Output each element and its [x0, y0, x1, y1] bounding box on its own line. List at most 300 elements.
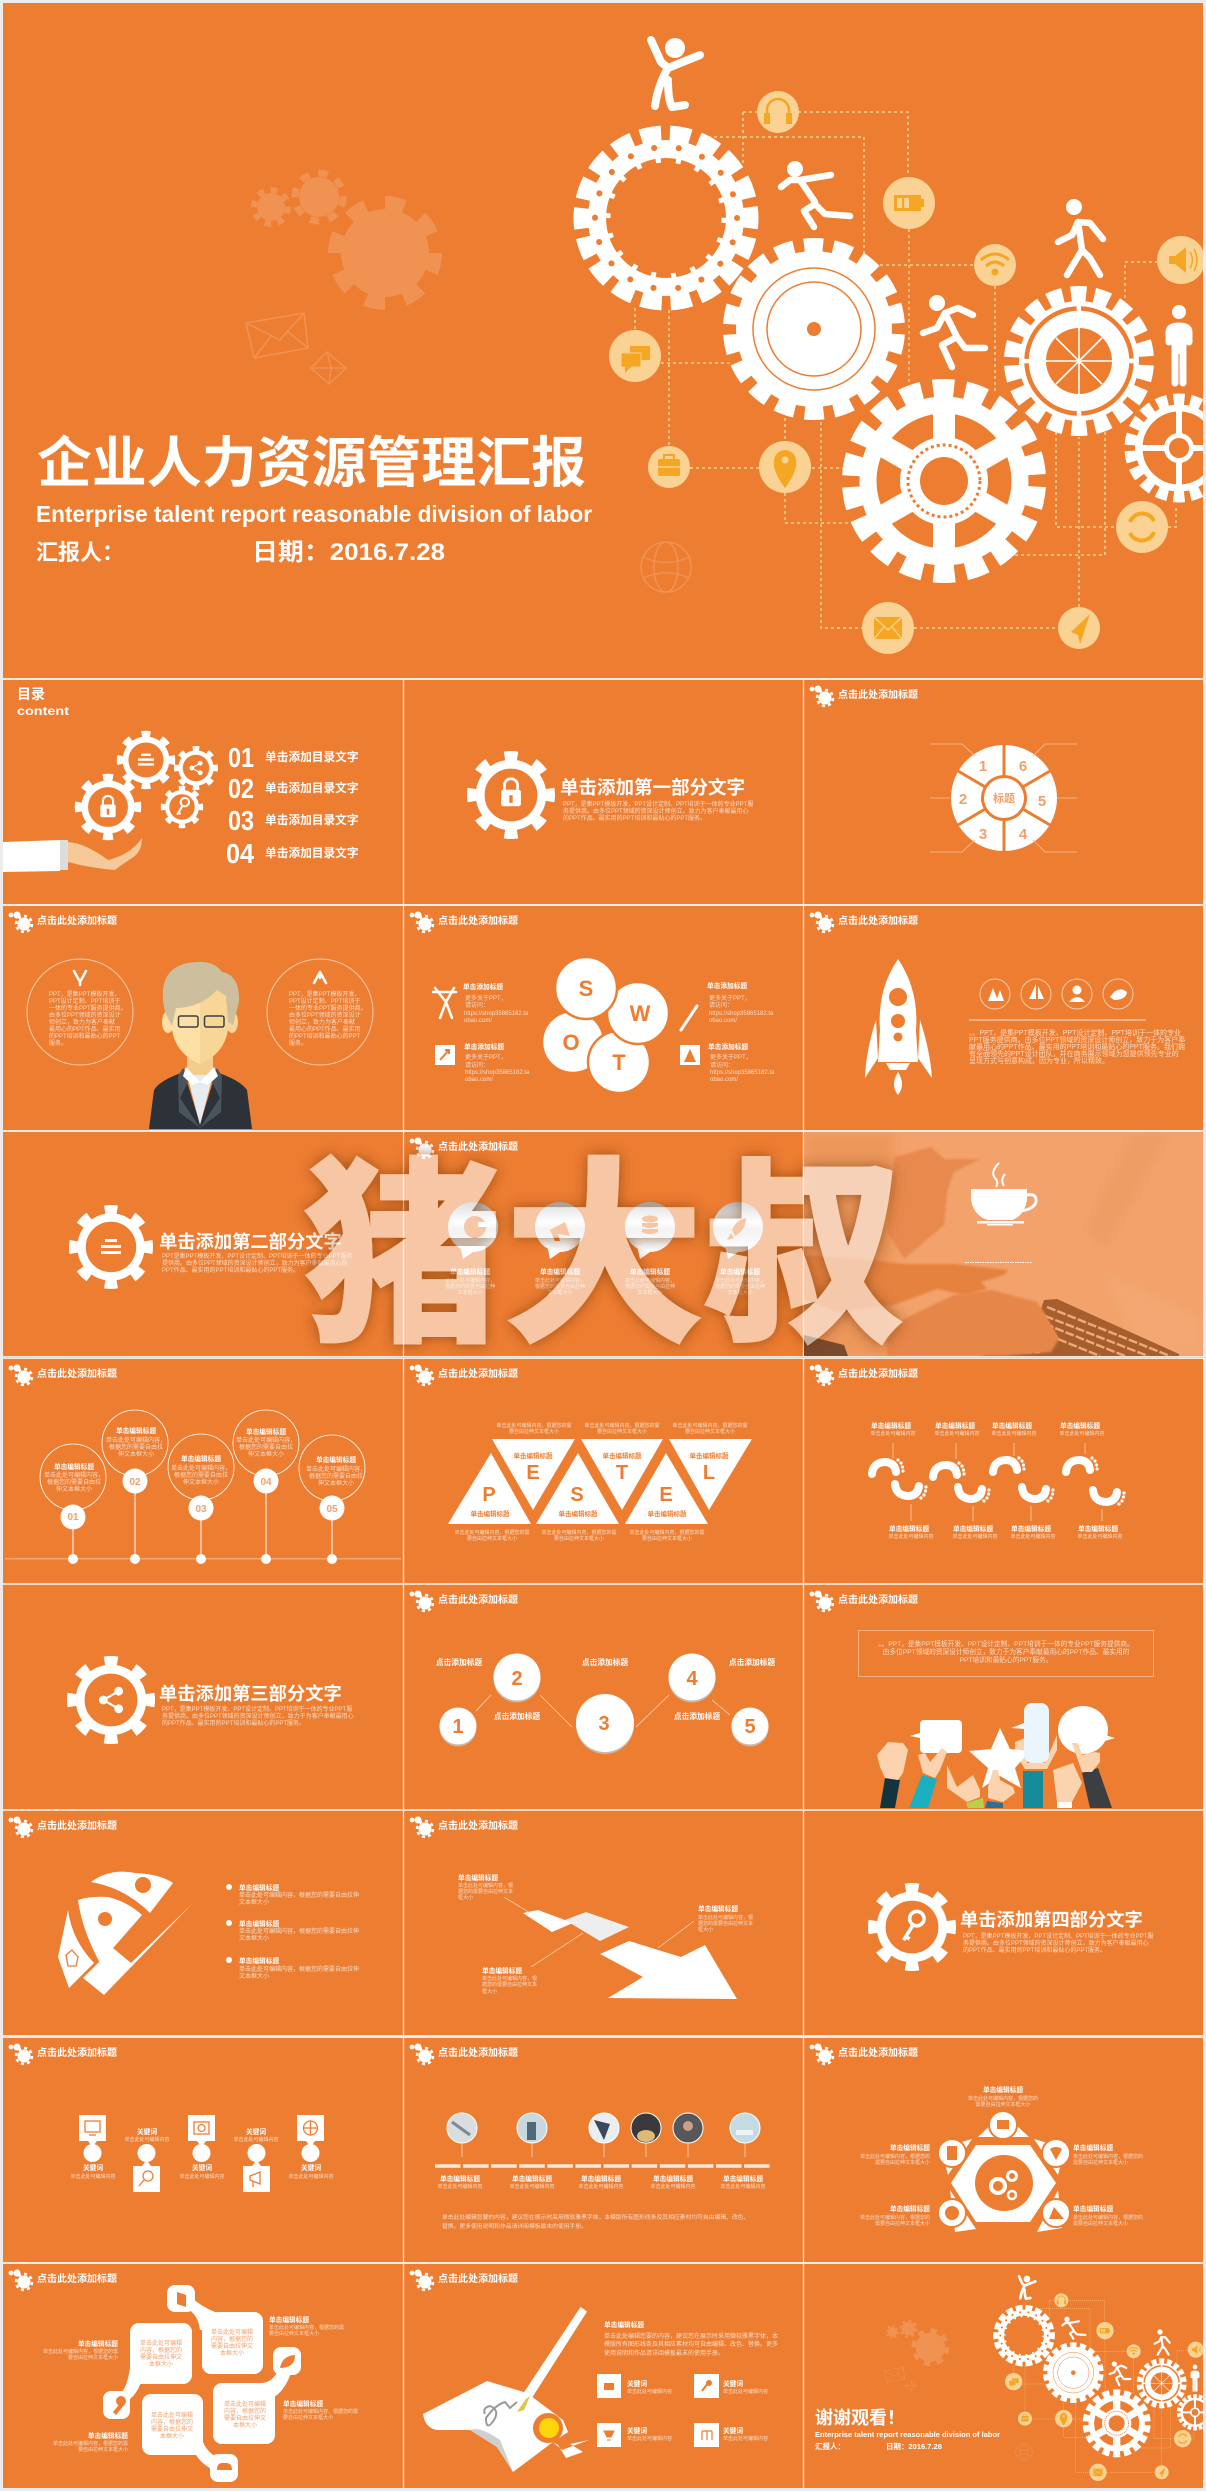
four round icons	[980, 979, 1133, 1009]
header title: 点击此处添加标题	[438, 2046, 518, 2059]
header logo	[810, 1364, 833, 1385]
side label right bottom: 单击此处可编辑内容，根据您的需	[283, 2408, 358, 2415]
label right lower	[1073, 2204, 1143, 2227]
bullet list: 文本框大小	[239, 1934, 269, 1942]
upper labels	[870, 1421, 1105, 1437]
label 3: 框大小	[482, 1988, 497, 1995]
header logo	[9, 1364, 32, 1385]
card texts: 内容，根据您的	[140, 2346, 182, 2354]
text above triangles: 要自由拉伸文本框大小	[597, 1428, 647, 1435]
side label right top: 单击此处可编辑内容，根据您的需	[269, 2324, 344, 2331]
flag icons	[85, 2121, 318, 2187]
illustration: rocket	[865, 959, 932, 1095]
header logo	[9, 2044, 32, 2064]
label 2: 单击编辑标题	[698, 1904, 738, 1913]
header logo	[9, 912, 32, 932]
section body: 务提供商。由多位PPT领域的资深设计师创立，致力于为客户奉献最用心	[162, 1712, 354, 1720]
rocket body text	[969, 1028, 1185, 1065]
label 3: 单击此处可编辑内容，根	[482, 1975, 537, 1982]
step labels: 点击添加标题	[729, 1657, 775, 1667]
header title: 点击此处添加标题	[838, 914, 918, 927]
text box: 。。PPT，是集PPT模板开发、PPT设计定制、PPT培训于一体的专业PPT服务提供商。	[878, 1639, 1134, 1648]
umbrella shape	[58, 1872, 192, 1995]
label left lower	[860, 2204, 930, 2227]
lower labels: 单击编辑标题	[953, 1524, 993, 1533]
section title: 单击添加第三部分文字	[159, 1683, 342, 1704]
card texts: 单击此处可编辑	[211, 2328, 253, 2336]
keyword tiles: 单击此处可编辑内容	[627, 2435, 672, 2442]
text below triangles	[454, 1529, 705, 1542]
upper labels: 单击编辑标题	[871, 1421, 911, 1430]
timeline labels: 单击此处可编辑内容	[720, 2183, 766, 2190]
photo pins	[447, 2113, 760, 2157]
note circle left: 最用心的PPT作品、最实用	[49, 1025, 121, 1033]
timeline body: 单击此处编辑您要的内容，建议您在展示时采用微软雅黑字体，本模版所有图形线条及其相应素材均可自由编辑、改色、	[442, 2213, 749, 2221]
bullet list: 单击编辑标题	[239, 1956, 279, 1965]
note circle left: 一体的专业PPT服务提供商。	[49, 1004, 127, 1012]
gear E	[1131, 400, 1206, 496]
SWOT petals: W	[630, 1001, 651, 1026]
side label left top: 要自由拉伸文本框大小	[68, 2354, 118, 2361]
upper labels: 单击此处可编辑内容	[991, 1430, 1037, 1437]
note body: 使用说明和作品请详阅模板最末的使用手册。	[604, 2349, 724, 2357]
wheel diagram: 标题	[993, 791, 1015, 805]
rocket body text: 有全面领先的PPT设计团队，并在商务展示领域为您提供领先专业的	[969, 1049, 1179, 1058]
timeline labels	[437, 2174, 766, 2190]
header logo	[810, 686, 833, 706]
bubble 2: 文本框大小	[547, 1289, 573, 1296]
icon: wifi	[974, 244, 1016, 286]
slide backgrounds grid	[3, 680, 1203, 2488]
slide: section three	[72, 1662, 354, 1738]
timeline item 02: 伸文本框大小	[118, 1450, 154, 1458]
slide: person with two notes	[9, 912, 373, 1129]
header logo	[410, 912, 433, 932]
illustration: businessman	[149, 962, 252, 1129]
bullet list: 单击此处可编辑内容，根据您的需要自由拉伸	[239, 1891, 359, 1899]
triangle labels: 单击编辑标题	[690, 1451, 729, 1460]
note circle left: 由多位PPT领域的资深设计	[49, 1011, 121, 1019]
card texts: 单击此处可编辑	[224, 2400, 266, 2408]
timeline item 05: 伸文本框大小	[318, 1479, 354, 1487]
note circle left: PPT，是集PPT模板开发、	[49, 990, 120, 998]
letters: E	[526, 1462, 540, 1484]
SWOT item T: obao.com/	[710, 1077, 738, 1083]
triangle labels: 单击编辑标题	[470, 1509, 510, 1518]
SWOT item O: 单击添加标题	[464, 1042, 504, 1051]
note circle right	[267, 959, 373, 1065]
slide: raised hands	[810, 1590, 1154, 1808]
upper labels: 单击编辑标题	[935, 1421, 975, 1430]
keyword labels: 单击此处可编辑内容	[179, 2173, 225, 2180]
timeline item 04: 根据您的需要自由拉	[239, 1443, 293, 1451]
icon: refresh	[1116, 501, 1168, 553]
section body	[162, 1252, 352, 1274]
side label left bottom	[53, 2431, 128, 2453]
thanks title: 谢谢观看！	[815, 2408, 905, 2428]
bullet list: 单击此处可编辑内容，根据您的需要自由拉伸	[239, 1927, 359, 1935]
timeline item 05: 单击编辑标题	[316, 1455, 356, 1464]
watermark: 叔	[705, 1098, 901, 1381]
label 1	[458, 1873, 513, 1901]
label 1: 单击编辑标题	[458, 1873, 498, 1882]
mini gear artwork	[884, 2276, 1206, 2481]
keyword tiles: 单击此处可编辑内容	[627, 2388, 672, 2395]
note circle right: 的PPT培训和最贴心的PPT	[289, 1032, 361, 1040]
triangle labels: 单击编辑标题	[558, 1509, 598, 1518]
header logo	[410, 1590, 433, 1611]
letters: E	[659, 1484, 673, 1506]
section title: 单击添加第四部分文字	[960, 1909, 1143, 1930]
side label right top: 单击编辑标题	[269, 2315, 309, 2324]
header logo	[410, 2270, 433, 2290]
header title: 点击此处添加标题	[838, 2046, 918, 2059]
card texts: 需要自由拉伸文	[224, 2414, 266, 2422]
note heading: 单击编辑标题	[604, 2320, 644, 2329]
lower labels: 单击编辑标题	[889, 1524, 929, 1533]
bubble 4	[713, 1202, 765, 1296]
timeline item 01	[40, 1444, 106, 1564]
slide: table of contents	[3, 686, 359, 872]
gear D	[1012, 294, 1146, 428]
contents list: 02	[228, 773, 254, 804]
SWOT item S: 请访问：	[465, 1001, 489, 1009]
upper labels: 单击编辑标题	[1060, 1421, 1100, 1430]
SWOT item S: obao.com/	[464, 1018, 492, 1024]
section body	[963, 1932, 1153, 1954]
note circle left: 师创立，致力为客户奉献	[49, 1018, 115, 1026]
step labels: 点击添加标题	[674, 1711, 720, 1721]
heading: content: content	[17, 704, 69, 718]
baseline	[5, 1558, 401, 1560]
gear A	[581, 133, 751, 303]
header title: 点击此处添加标题	[838, 1367, 918, 1380]
connected cards	[103, 2285, 301, 2482]
bubble 3: 单击此处可编辑内容，	[625, 1277, 675, 1284]
step numbers: 3	[598, 1713, 610, 1735]
timeline item 03	[168, 1434, 234, 1564]
text above triangles: 要自由拉伸文本框大小	[509, 1428, 559, 1435]
cover title: 企业人力资源管理汇报	[37, 432, 586, 494]
bubble 2: 单击此处可编辑内容，	[535, 1277, 585, 1284]
text above triangles: 单击此处可编辑内容，根据您的需	[496, 1422, 572, 1429]
card texts: 内容，根据您的	[151, 2418, 193, 2426]
slide: five circles timeline	[5, 1364, 401, 1564]
header logo	[9, 1816, 32, 1837]
side label right bottom	[283, 2399, 358, 2421]
SWOT item S	[433, 982, 529, 1024]
timeline item 05: 单击此处可编辑内容，	[306, 1465, 366, 1473]
bubble 3: 文本框大小	[637, 1289, 663, 1296]
step numbers: 4	[686, 1668, 698, 1690]
keyword tiles: 单击此处可编辑内容	[723, 2388, 768, 2395]
bubble 4: 文本框大小	[727, 1289, 753, 1296]
slide: five numbered steps	[410, 1590, 775, 1754]
label 2: 单击此处可编辑内容，根	[698, 1914, 753, 1921]
slide: six-part wheel	[810, 686, 1077, 852]
section body: 提供商。由多位PPT领域的资深设计师创立，致力为客户奉献最用心的	[162, 1259, 348, 1267]
timeline item 01: 单击此处可编辑内容，	[44, 1471, 104, 1479]
side label left bottom: 要自由拉伸文本框大小	[78, 2446, 128, 2453]
keyword labels: 关键词	[246, 2127, 266, 2136]
header logo	[410, 2044, 433, 2064]
label top: 单击此处可编辑内容，根据您的	[968, 2095, 1038, 2102]
triangle labels	[470, 1451, 729, 1518]
slide 1: cover	[3, 3, 1206, 678]
rocket body text: PPT服务提供商。由多位PPT领域的资深设计师创立，致力于为客户奉	[969, 1035, 1185, 1044]
keyword labels: 单击此处可编辑内容	[233, 2136, 279, 2143]
label left upper: 单击编辑标题	[890, 2143, 930, 2152]
keyword tiles	[597, 2374, 768, 2447]
section body: PPT是集PPT模板开发、PPT设计定制、PPT培训于一体的专业PPT服务	[162, 1252, 352, 1260]
illustration: pen and signed paper	[423, 2309, 589, 2472]
timeline labels: 单击此处可编辑内容	[509, 2183, 555, 2190]
wheel diagram: 6	[1019, 758, 1027, 775]
lower labels: 单击此处可编辑内容	[888, 1533, 934, 1540]
SWOT item W: 请访问：	[709, 1001, 733, 1009]
keyword labels: 关键词	[83, 2163, 103, 2172]
label left upper: 需要自由拉伸文本框大小	[875, 2159, 930, 2166]
wheel diagram: 5	[1038, 793, 1046, 810]
lower labels: 单击此处可编辑内容	[1010, 1533, 1056, 1540]
SWOT item T: 单击添加标题	[708, 1042, 748, 1051]
watermark: 猪	[304, 1098, 500, 1381]
header title: 点击此处添加标题	[37, 914, 117, 927]
SWOT item W	[681, 981, 774, 1030]
contents list: 04	[226, 838, 254, 869]
text above triangles: 要自由拉伸文本框大小	[685, 1428, 735, 1435]
side label left top	[43, 2339, 118, 2361]
note body: 模版所有图形线条及其相应素材均可自由编辑、改色、替换。更多	[604, 2340, 778, 2348]
letters: L	[703, 1462, 715, 1484]
SWOT item O: 请访问：	[465, 1061, 489, 1069]
hand holding gears	[3, 838, 142, 872]
timeline item 05: 根据您的需要自由拉	[309, 1472, 363, 1480]
wheel diagram: 2	[959, 791, 967, 808]
bubble 1: 根据您的需要自由拉伸	[445, 1283, 495, 1290]
label left lower: 单击编辑标题	[890, 2204, 930, 2213]
wheel diagram: 3	[979, 826, 987, 843]
timeline item 02: 单击编辑标题	[116, 1426, 156, 1435]
note circle right: 师创立，致力为客户奉献	[289, 1018, 355, 1026]
keyword labels: 关键词	[137, 2127, 157, 2136]
SWOT item O	[435, 1042, 530, 1083]
wheel diagram: 1	[979, 758, 987, 775]
upper labels: 单击此处可编辑内容	[870, 1430, 916, 1437]
SWOT item T	[680, 1042, 775, 1083]
text below triangles: 单击此处可编辑内容，根据您的需	[629, 1529, 705, 1536]
side label right bottom: 单击编辑标题	[283, 2399, 323, 2408]
text above triangles: 单击此处可编辑内容，根据您的需	[584, 1422, 660, 1429]
header title: 点击此处添加标题	[438, 1593, 518, 1606]
note circle right: 服务。	[289, 1039, 307, 1047]
label right lower: 需要自由拉伸文本框大小	[1073, 2220, 1128, 2227]
SWOT petals: O	[562, 1030, 580, 1055]
keyword labels: 单击此处可编辑内容	[70, 2173, 116, 2180]
section body: PPT，是集PPT模板开发、PPT设计定制、PPT培训于一体的专业PPT服	[563, 800, 753, 808]
illustration: raised hands with signs	[877, 1703, 1115, 1808]
bubble 4: 单击编辑标题	[720, 1267, 760, 1276]
label 1: 据您的需要自由拉伸文本	[458, 1888, 513, 1895]
timeline body	[442, 2213, 749, 2230]
text box	[858, 1630, 1154, 1676]
slide: four linked cards	[9, 2270, 358, 2482]
contents list: 01	[228, 742, 254, 773]
footprints	[872, 1456, 1126, 1506]
icon: paper plane	[1058, 607, 1100, 649]
label right upper: 需要自由拉伸文本框大小	[1073, 2159, 1128, 2166]
section body: PPT，是集PPT模板开发、PPT设计定制、PPT培训于一体的专业PPT服	[963, 1932, 1153, 1940]
keyword labels: 关键词	[301, 2163, 321, 2172]
label top: 单击编辑标题	[983, 2085, 1023, 2094]
card texts: 内容，根据您的	[224, 2407, 266, 2415]
slide: SWOT	[410, 912, 775, 1093]
side label left bottom: 单击此处可编辑内容，根据您的需	[53, 2440, 128, 2447]
step numbers	[452, 1668, 756, 1738]
thanks subtitle: Enterprise talent report reasonable division of labor	[815, 2432, 1000, 2439]
text below triangles: 单击此处可编辑内容，根据您的需	[454, 1529, 530, 1536]
bullet list: 文本框大小	[239, 1972, 269, 1980]
divider	[969, 1019, 1146, 1021]
icon: map pin	[759, 441, 811, 493]
note circle left: 的PPT培训和最贴心的PPT	[49, 1032, 121, 1040]
note circle right: 最用心的PPT作品、最实用	[289, 1025, 361, 1033]
connector dashed lines	[635, 112, 1176, 628]
bubble 4: 根据您的需要自由拉伸	[715, 1283, 765, 1290]
bubble 2	[535, 1202, 585, 1296]
slide: section two	[74, 1210, 352, 1284]
bubble 1	[445, 1202, 498, 1296]
step numbers: 5	[744, 1716, 756, 1738]
icon: headphones	[757, 91, 799, 133]
header title: 点击此处添加标题	[438, 914, 518, 927]
side label left bottom: 单击编辑标题	[88, 2431, 128, 2440]
card texts: 单击此处可编辑	[140, 2339, 182, 2347]
bubble 1: 单击编辑标题	[450, 1267, 490, 1276]
step numbers: 1	[452, 1716, 464, 1738]
header logo	[410, 1138, 433, 1158]
slide: thank you	[815, 2276, 1206, 2481]
card texts: 内容，根据您的	[211, 2335, 253, 2343]
label right lower: 单击此处可编辑内容，根据您的	[1073, 2214, 1143, 2221]
ghost gears and envelopes	[246, 173, 691, 592]
timeline labels: 单击编辑标题	[653, 2174, 693, 2183]
icon: chat	[609, 330, 661, 382]
label left lower: 单击此处可编辑内容，根据您的	[860, 2214, 930, 2221]
keyword labels: 单击此处可编辑内容	[124, 2136, 170, 2143]
label 3	[482, 1966, 537, 1995]
header title: 点击此处添加标题	[37, 1367, 117, 1380]
gear C	[851, 388, 1037, 574]
card texts: 本框大小	[160, 2432, 184, 2440]
card texts: 本框大小	[233, 2421, 257, 2429]
slide: rocket	[810, 912, 1185, 1095]
rocket body text: 献最用心的PPT作品、最实用的PPT培训和最贴心的PPT服务。我们拥	[969, 1042, 1185, 1051]
bullet list: 单击编辑标题	[239, 1883, 279, 1892]
label 3: 单击编辑标题	[482, 1966, 522, 1975]
text above triangles	[496, 1422, 748, 1435]
header title: 点击此处添加标题	[438, 1367, 518, 1380]
gear cluster	[79, 734, 215, 836]
keyword labels: 关键词	[192, 2163, 212, 2172]
text below triangles: 要自由拉伸文本框大小	[467, 1535, 517, 1542]
contents list	[226, 742, 359, 869]
rocket body text: 。。PPT，是集PPT模板开发、PPT设计定制、PPT培训于一体的专业	[969, 1028, 1181, 1037]
timeline labels: 单击编辑标题	[440, 2174, 480, 2183]
header logo	[410, 1364, 433, 1385]
step labels: 点击添加标题	[494, 1711, 540, 1721]
letters: S	[570, 1484, 584, 1506]
side label right bottom: 要自由拉伸文本框大小	[283, 2414, 333, 2421]
SWOT item W: obao.com/	[709, 1018, 737, 1024]
note circle right: 由多位PPT领域的资深设计	[289, 1011, 361, 1019]
icon rings	[938, 2111, 1070, 2227]
keyword tiles: 关键词	[627, 2379, 647, 2388]
label right lower: 单击编辑标题	[1073, 2204, 1113, 2213]
section body: 的PPT作品、最实用的PPT培训和最贴心的PPT服务。	[162, 1719, 305, 1727]
slide: broken arrow	[410, 1816, 753, 1999]
timeline labels: 单击此处可编辑内容	[437, 2183, 483, 2190]
contents list: 单击添加目录文字	[265, 813, 359, 827]
keyword tiles: 关键词	[723, 2426, 743, 2435]
section body: 的PPT作品、最实用的PPT培训和最贴心的PPT服务。	[963, 1946, 1106, 1954]
timeline item 02	[102, 1410, 168, 1564]
note circle right: 一体的专业PPT服务提供商。	[289, 1004, 367, 1012]
card texts: 需要自由拉伸文	[151, 2425, 193, 2433]
label right upper: 单击编辑标题	[1073, 2143, 1113, 2152]
upper labels: 单击编辑标题	[992, 1421, 1032, 1430]
section body: PPT作品、最实用的PPT培训和最贴心的PPT服务。	[162, 1266, 299, 1274]
bullet list	[226, 1883, 359, 1980]
label top: 需要自由拉伸文本框大小	[975, 2101, 1031, 2108]
side label right top	[269, 2315, 344, 2337]
timeline labels: 单击此处可编辑内容	[650, 2183, 696, 2190]
card icons	[113, 2292, 295, 2470]
thanks date: 日期：2016.7.28	[886, 2441, 942, 2451]
slide: umbrella segments	[9, 1816, 359, 1995]
bubble 4: 单击此处可编辑内容，	[715, 1277, 765, 1284]
section title: 单击添加第二部分文字	[159, 1231, 342, 1252]
note circle right: PPT设计定制、PPT培训于	[289, 997, 360, 1005]
label 1: 框大小	[458, 1894, 473, 1901]
bubble 1: 单击此处可编辑内容，	[445, 1277, 495, 1284]
lower labels: 单击编辑标题	[1011, 1524, 1051, 1533]
timeline item 04	[233, 1410, 299, 1564]
label 2: 据您的需要自由拉伸文本	[698, 1920, 753, 1927]
timeline body: 替换。更多使用说明和作品请详阅模板最末的使用手册。	[442, 2222, 587, 2230]
timeline item 03: 单击此处可编辑内容，	[171, 1464, 231, 1472]
bullet list: 单击编辑标题	[239, 1919, 279, 1928]
bullet list: 单击此处可编辑内容，根据您的需要自由拉伸	[239, 1965, 359, 1973]
bubble 3: 根据您的需要自由拉伸	[625, 1283, 675, 1290]
timeline item 02: 单击此处可编辑内容，	[106, 1436, 166, 1444]
slide: keyword flags	[9, 2044, 334, 2192]
keyword tiles: 关键词	[723, 2379, 743, 2388]
header logo	[410, 1816, 433, 1837]
SWOT petals: T	[612, 1050, 626, 1075]
section body: PPT，是集PPT模板开发、PPT设计定制、PPT培训于一体的专业PPT服	[162, 1705, 352, 1713]
slide: section four	[874, 1888, 1153, 1966]
SWOT item O: https://shop35865182.ta	[465, 1070, 530, 1076]
text below triangles: 要自由拉伸文本框大小	[642, 1535, 692, 1542]
note body: 单击此处编辑您要的内容，建议您在展示时采用微软雅黑字体，本	[604, 2332, 778, 2340]
step numbers: 2	[511, 1668, 523, 1690]
header title: 点击此处添加标题	[438, 2272, 518, 2285]
cover reporter: 汇报人：	[36, 540, 124, 565]
slide: star hexagon	[810, 2044, 1143, 2232]
letters	[482, 1462, 715, 1506]
timeline item 03: 03	[195, 1504, 207, 1515]
